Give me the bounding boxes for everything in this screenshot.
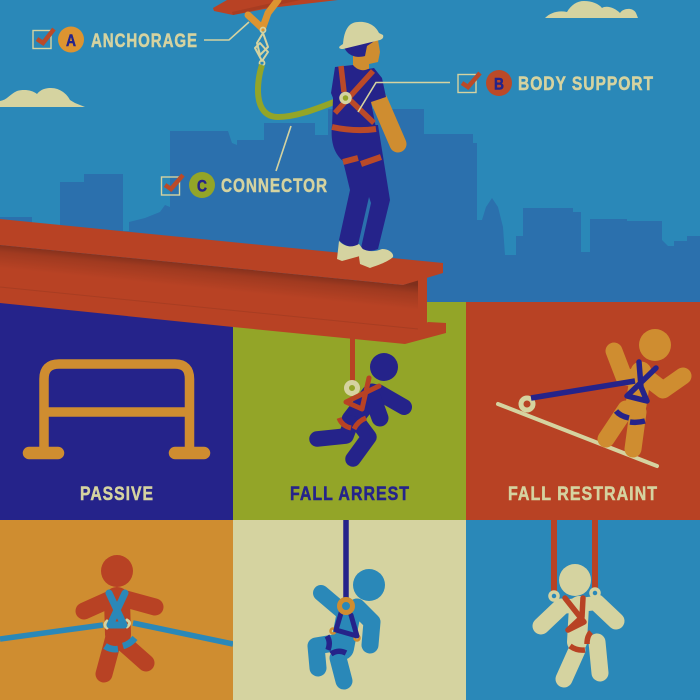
text: CONNECTOR [221, 175, 328, 197]
sky background [0, 0, 700, 310]
city skyline [0, 109, 700, 310]
leader line [276, 126, 291, 171]
label: fall arrest: FALL ARREST [290, 484, 410, 505]
worker hair [344, 40, 376, 57]
harness D-ring [341, 94, 350, 102]
checkbox [458, 73, 480, 92]
badge B [486, 70, 512, 96]
panel: passive [0, 290, 234, 520]
text: BODY SUPPORT [518, 73, 654, 95]
panel: bottom middle figure [233, 520, 467, 700]
label: anchorage [33, 22, 249, 52]
worker shirt [331, 65, 386, 128]
text: ANCHORAGE [91, 30, 198, 52]
worker figure [331, 22, 398, 268]
badge C: C [197, 176, 207, 196]
panel: bottom left figure [0, 520, 234, 700]
label: body support [358, 70, 654, 112]
icon: fall restraint figure [498, 329, 683, 466]
badge C [189, 172, 215, 198]
leader line [358, 82, 450, 112]
worker head and neck [353, 40, 380, 71]
overhead beam [213, 0, 338, 15]
icon: cream panel figure [316, 520, 385, 681]
icon: blue panel figure [541, 520, 616, 679]
panel: bottom right figure [466, 520, 700, 700]
badge B: B [494, 74, 504, 94]
label: fall restraint: FALL RESTRAINT [508, 484, 658, 505]
worker hard hat [339, 22, 383, 49]
icon: lanyard connector [258, 65, 345, 117]
badge A: A [66, 31, 76, 50]
harness straps [332, 66, 381, 164]
panel: fall restraint [466, 302, 700, 520]
badge A [58, 26, 84, 52]
steel I-beam [0, 219, 446, 344]
worker shoes [337, 241, 393, 268]
checkbox [162, 175, 183, 195]
panel: fall arrest [233, 302, 466, 520]
label: passive: PASSIVE [80, 484, 154, 505]
checkbox [33, 29, 54, 48]
cloud left [0, 88, 85, 107]
leader line [204, 22, 249, 40]
label: connector [162, 126, 328, 198]
icon: orange panel figure [0, 555, 233, 674]
icon: guard rail [29, 364, 204, 453]
icon: fall arrest figure [317, 338, 404, 459]
worker arm [379, 100, 398, 144]
icon: anchorage chain and snap hook [248, 0, 278, 66]
cloud right [545, 1, 638, 18]
worker pants [332, 125, 390, 251]
